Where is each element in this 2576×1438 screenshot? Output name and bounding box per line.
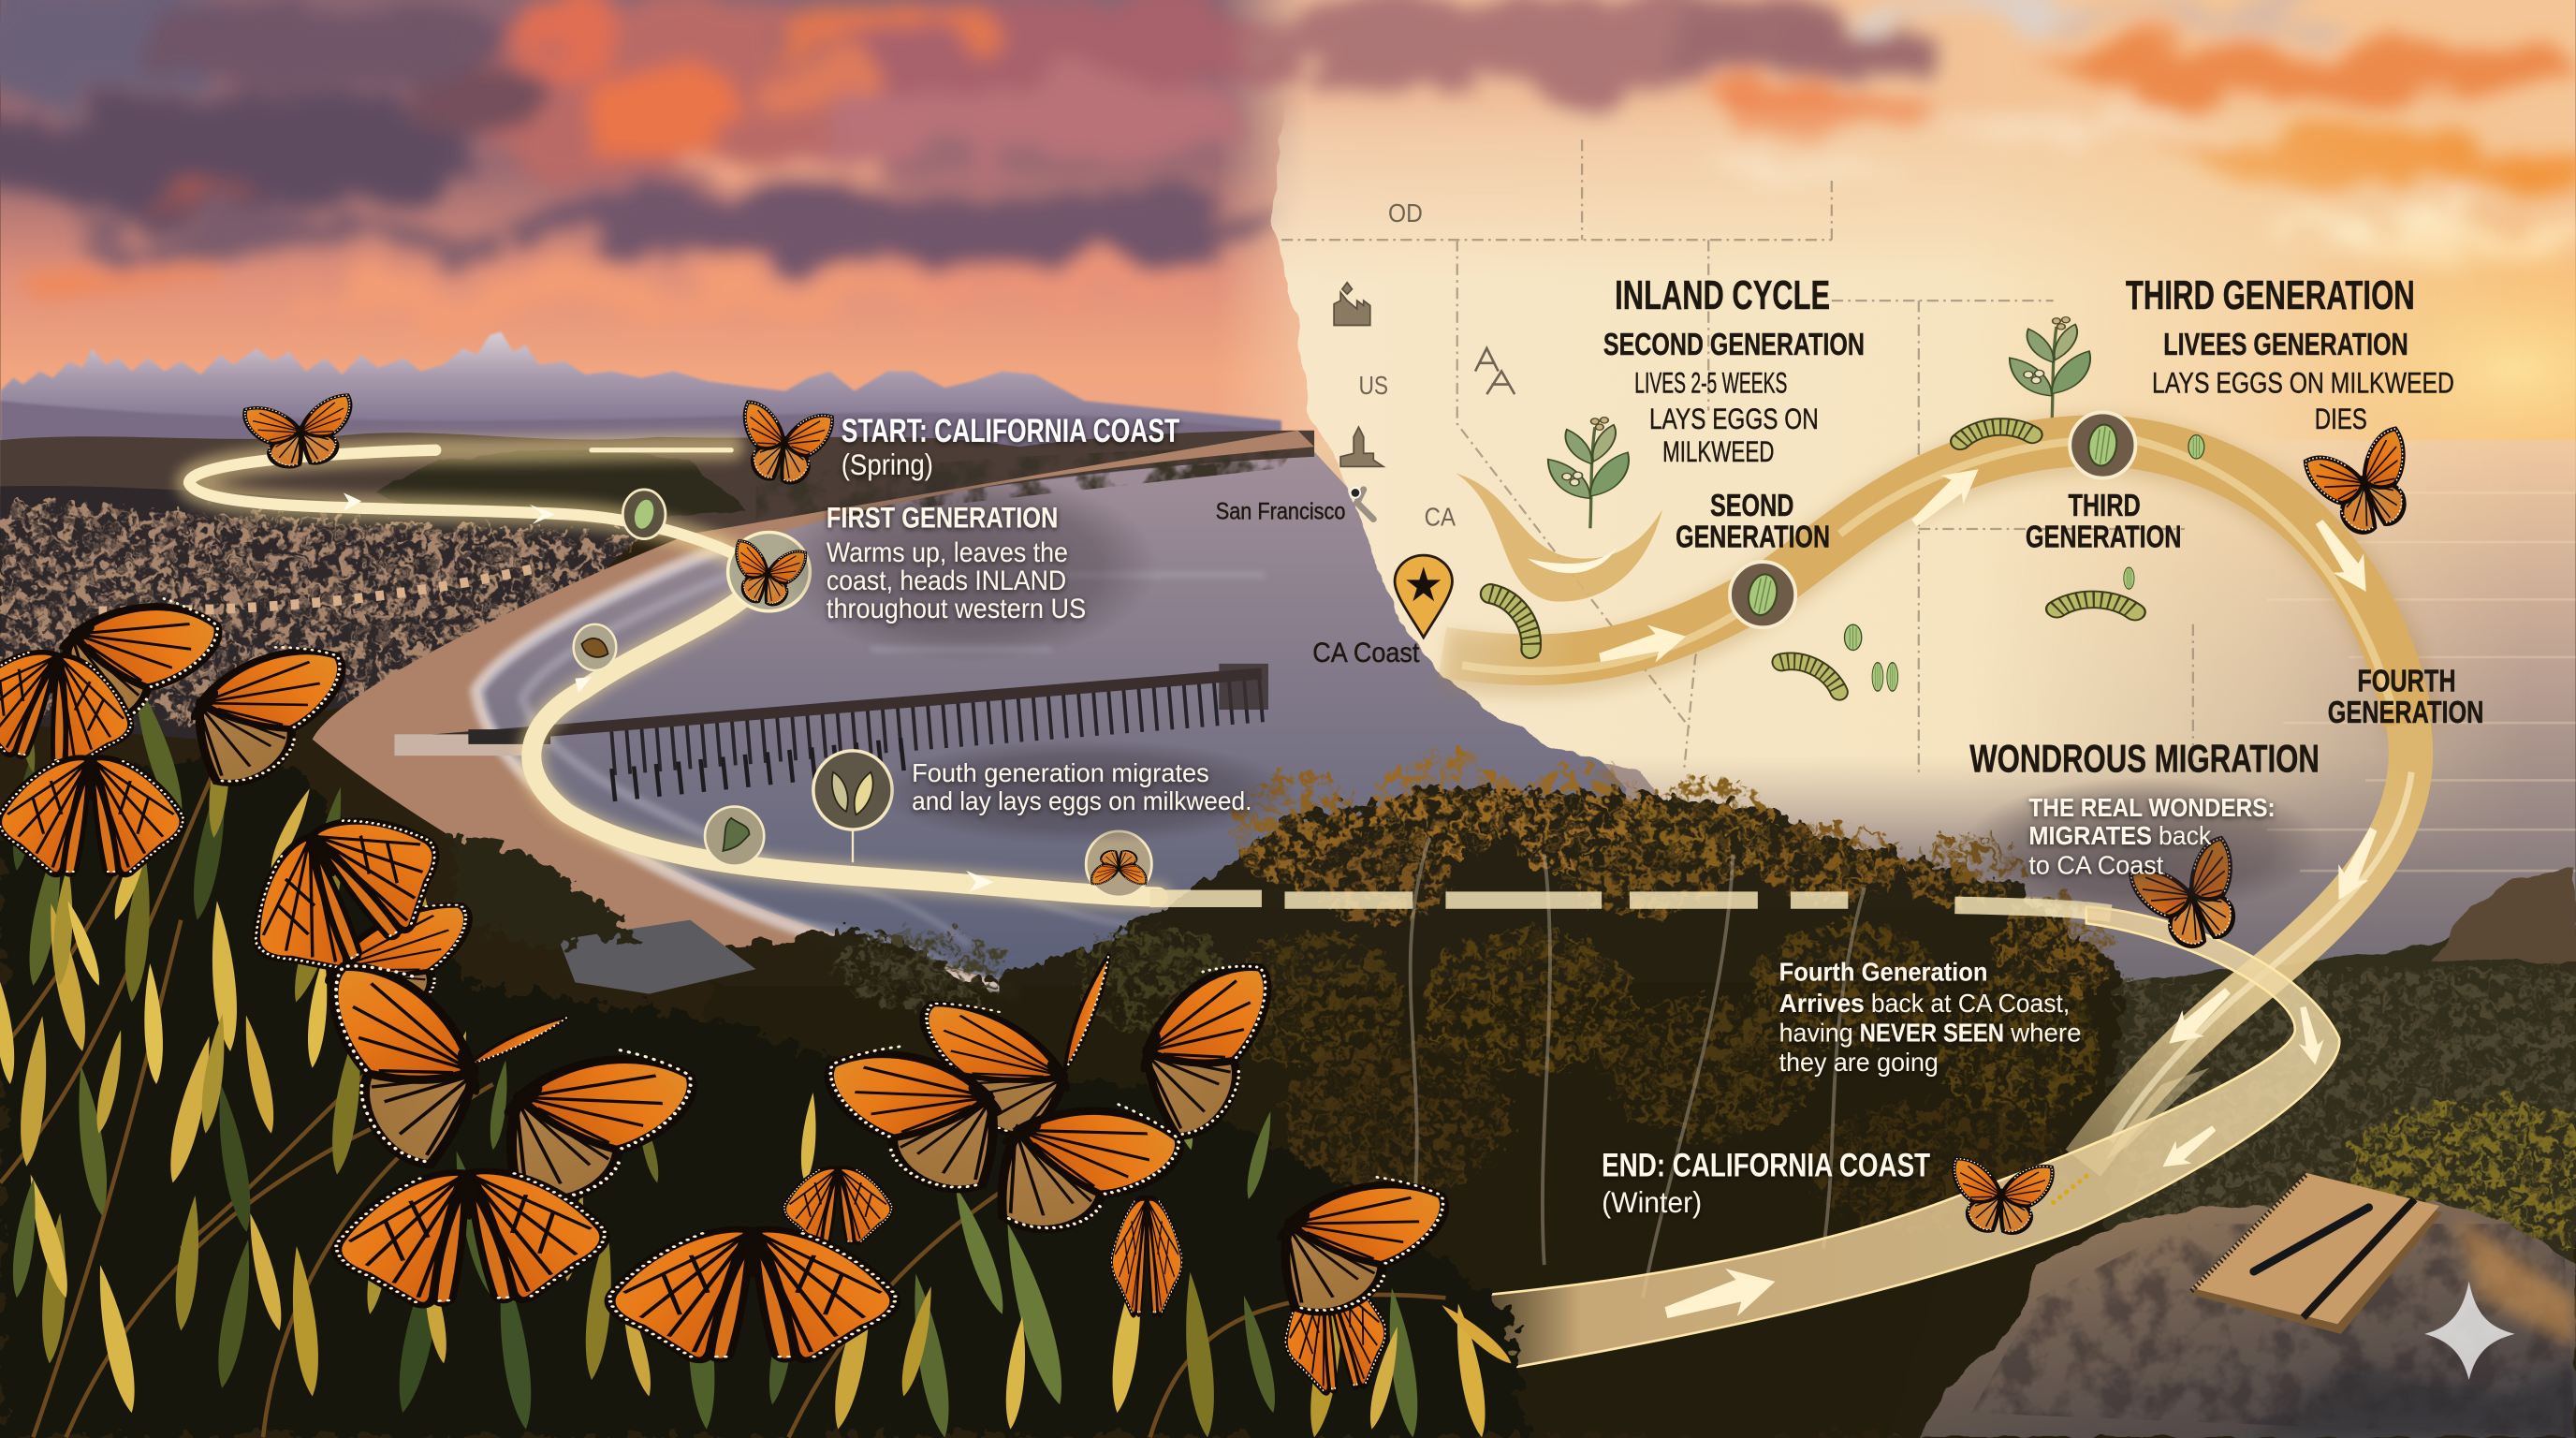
text: start label: (Spring) [842,448,933,481]
ribbon highlight [1462,440,2392,707]
text: real wonders: back [2159,821,2212,850]
lower translucent ribbon [1454,907,2339,1370]
trail dots [2054,1176,2086,1202]
leaves [0,674,1515,1438]
icon: map pin CA Coast [1395,555,1452,638]
text: first generation: coast, heads INLAND [827,565,1066,596]
butterfly wondrous migration [2130,837,2257,960]
first generation glowing path on left [189,447,1158,897]
leafy tree crowns [831,753,2113,1232]
text: third generation block [2126,272,2454,435]
text: end label: (Winter) [1602,1185,1702,1219]
icon: milkweed left [1548,418,1629,528]
monarch butterfly cluster [0,562,1449,1399]
ocean at left bay [468,452,1626,1002]
text: third generation block: DIES [2315,402,2367,435]
rock outcrop [1922,1199,2576,1437]
text: third generation block: LIVEES GENERATION [2163,328,2408,362]
caterpillar top [1960,425,2032,441]
text: fourth generation arrives: Fourth Generation [1779,958,1988,987]
town on left shore [0,486,649,740]
far coastal hills [0,431,1314,542]
node: butterfly on path [1086,831,1151,897]
ribbon descending [2083,723,2411,1163]
ribbon upper [1442,440,2408,723]
foreground eucalyptus foliage [0,674,1528,1438]
text: inland cycle block: SECOND GENERATION [1603,328,1865,362]
text: first generation [827,500,1086,624]
text: real wonders: THE REAL WONDERS: [2028,793,2276,822]
node: milkweed circle [705,807,764,866]
text: third generation node label: GENERATION [2026,520,2182,554]
text: fourth generation arrives: back at CA Coast, [1871,989,2070,1018]
text: end label: END: CALIFORNIA COAST [1602,1147,1931,1183]
dark backdrop [0,740,1528,1437]
text: fourth generation arrives: NEVER SEEN [1860,1018,2004,1047]
text: fourth generation node label: FOURTH [2357,665,2456,699]
text: fourth generation arrives: where [2010,1018,2082,1047]
text: end label [1602,1147,1931,1219]
text: inland cycle block [1603,272,1865,468]
map state labels [1358,198,1456,532]
icon: milkweed right [2010,317,2090,425]
state border lines [1281,139,2193,772]
butterfly at start of path [244,394,358,473]
ribbon arrows [1595,455,2391,1333]
text: inland cycle block: MILKWEED [1662,434,1774,468]
butterfly by start label [735,402,833,489]
text: real wonders: MIGRATES [2028,821,2152,850]
icon: mountain peaks [1475,348,1515,394]
icon: city landmark [1334,283,1370,325]
icon: sparkle watermark [2424,1282,2515,1380]
text: first generation: throughout western US [827,594,1086,624]
text: second generation node label: SEOND [1710,489,1793,523]
node: wing circle [574,624,616,670]
caterpillar lower right [2056,597,2135,613]
text: inland cycle block: LAYS EGGS ON [1649,402,1819,435]
text: third generation block: THIRD GENERATION [2126,272,2415,318]
text: real wonders: to CA Coast [2028,851,2163,880]
stems [0,772,1445,1437]
sky background with sunset clouds [0,0,2576,492]
text: wondrous migration heading: WONDROUS MIGRATION [1969,737,2320,781]
text: third generation node label [2026,489,2182,554]
swoosh inland [1456,473,1662,602]
text: start label: START: CALIFORNIA COAST [842,413,1180,449]
sandy beach [313,431,1314,992]
clouds: purple and orange bands [0,0,2576,320]
path lower core [532,575,1158,897]
text: fourth generation arrives: they are going [1779,1048,1939,1077]
sun glow at right [2217,198,2576,542]
path glow [189,447,1158,897]
torn parchment shape [1271,98,2576,871]
path visible through gaps in trees [1150,899,2111,914]
text: fourth generation arrives [1779,958,2082,1077]
path behind trees [1150,899,2111,914]
text: start label [842,413,1180,481]
dark halo behind white text [781,472,2324,915]
San Francisco marker: San Francisco [1216,499,1345,524]
text: fourth generation arrives: Arrives [1779,989,1865,1018]
text: fourth generation migrates: Fouth generation migrates [912,758,1209,787]
main gold ribbon on map [1442,440,2415,1163]
notebook and pen [2191,1173,2443,1334]
small path arrows [344,492,994,892]
map state labels: OD [1388,198,1423,227]
text: third generation node label: THIRD [2068,489,2141,523]
text: first generation: Warms up, leaves the [827,537,1068,568]
text: second generation node label [1676,489,1830,554]
text: inland cycle block: LIVES 2-5 WEEKS [1634,365,1787,399]
path core [189,450,769,575]
map state labels: US [1358,371,1388,400]
text: fourth generation migrates [912,758,1251,815]
San Francisco marker [1216,488,1373,524]
eggs on map [1845,435,2204,691]
coastal palms and road [452,835,755,994]
text: CA Coast: CA Coast [1312,638,1420,668]
distant mountains [0,331,1281,526]
text: real wonders [2028,793,2276,880]
text: fourth generation arrives: having [1779,1018,1853,1047]
far path segment [592,448,731,451]
caterpillar lower left [1781,652,1844,693]
ocean at right [1281,440,2576,982]
text: second generation node label: GENERATION [1676,520,1830,554]
pier [394,664,1273,785]
text: inland cycle block: INLAND CYCLE [1615,272,1830,318]
text: first generation: FIRST GENERATION [827,500,1058,534]
icon: tower landmark [1340,427,1383,466]
caterpillar on map [1490,586,1541,650]
node: leaf on path [622,490,666,539]
ribbon shadow [1445,444,2415,731]
right hillside and headland [1889,867,2576,1437]
text: fourth generation migrates: and lay lays eggs on milkweed. [912,786,1251,815]
map panel: parchment western US with torn coast [1216,98,2576,871]
text: fourth generation node label [2328,665,2483,730]
node: butterfly circle [728,533,810,611]
node: second generation egg [1730,562,1795,627]
tree mass centre [707,753,2119,1437]
text: fourth generation node label: GENERATION [2328,696,2483,730]
node: third generation egg [2070,412,2135,478]
small butterfly near ribbon end [1949,1158,2053,1237]
butterfly third generation [2304,428,2427,544]
text: third generation block: LAYS EGGS ON MILKWEED [2152,365,2454,399]
map state labels: CA [1425,503,1456,532]
node: eggs callout with pin [813,751,892,862]
